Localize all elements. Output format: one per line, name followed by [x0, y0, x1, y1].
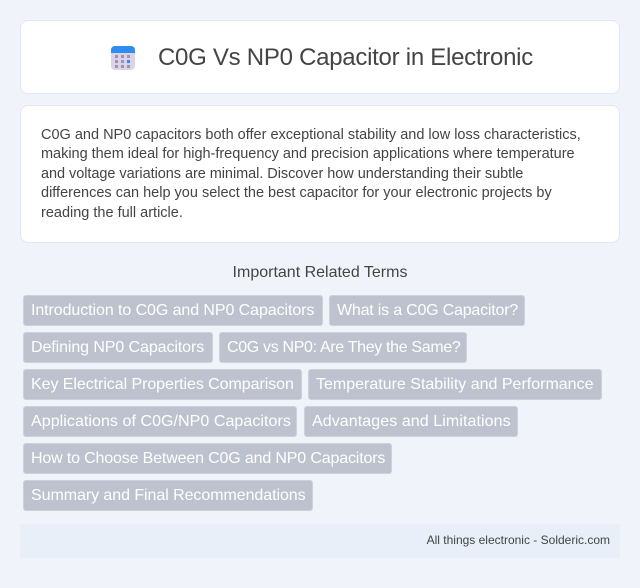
- tag: [304, 406, 518, 437]
- related term tags: [23, 295, 602, 511]
- tag: Temperature Stability and Performance: [316, 376, 593, 393]
- tag: C0G vs NP0: Are They the Same?: [227, 339, 460, 356]
- tag: [308, 369, 602, 400]
- tag: [23, 369, 302, 400]
- tag: Introduction to C0G and NP0 Capacitors: [31, 302, 314, 319]
- intro card: [20, 105, 620, 243]
- intro paragraph: and voltage variations are minimal. Discover how understanding their subtle: [41, 166, 523, 182]
- tag: [23, 332, 213, 363]
- icon: calendar grid: [111, 46, 135, 70]
- tag: Advantages and Limitations: [312, 413, 511, 430]
- section heading: Important Related Terms: [233, 264, 407, 281]
- footer credit: All things electronic - Solderic.com: [427, 533, 610, 547]
- tag: [23, 295, 323, 326]
- tag: [23, 406, 297, 437]
- tag: Applications of C0G/NP0 Capacitors: [31, 413, 291, 430]
- intro paragraph: making them ideal for high-frequency and precision applications where temperature: [41, 146, 575, 162]
- tag: Defining NP0 Capacitors: [31, 339, 204, 356]
- tag: [219, 332, 467, 363]
- tag: [329, 295, 525, 326]
- intro paragraph: differences can help you select the best capacitor for your electronic projects by: [41, 185, 552, 201]
- title: C0G Vs NP0 Capacitor in Electronic: [158, 44, 533, 71]
- tag: [23, 443, 392, 474]
- tag: Key Electrical Properties Comparison: [31, 376, 294, 393]
- intro paragraph: reading the full article.: [41, 205, 183, 221]
- intro paragraph: C0G and NP0 capacitors both offer exceptional stability and low loss characteristics,: [41, 127, 581, 143]
- footer bar: [20, 524, 620, 558]
- tag: What is a C0G Capacitor?: [337, 302, 518, 319]
- tag: [23, 480, 313, 511]
- intro paragraph: [41, 127, 581, 221]
- tag: How to Choose Between C0G and NP0 Capacitors: [31, 450, 385, 467]
- header card: [20, 20, 620, 94]
- tag: Summary and Final Recommendations: [31, 487, 306, 504]
